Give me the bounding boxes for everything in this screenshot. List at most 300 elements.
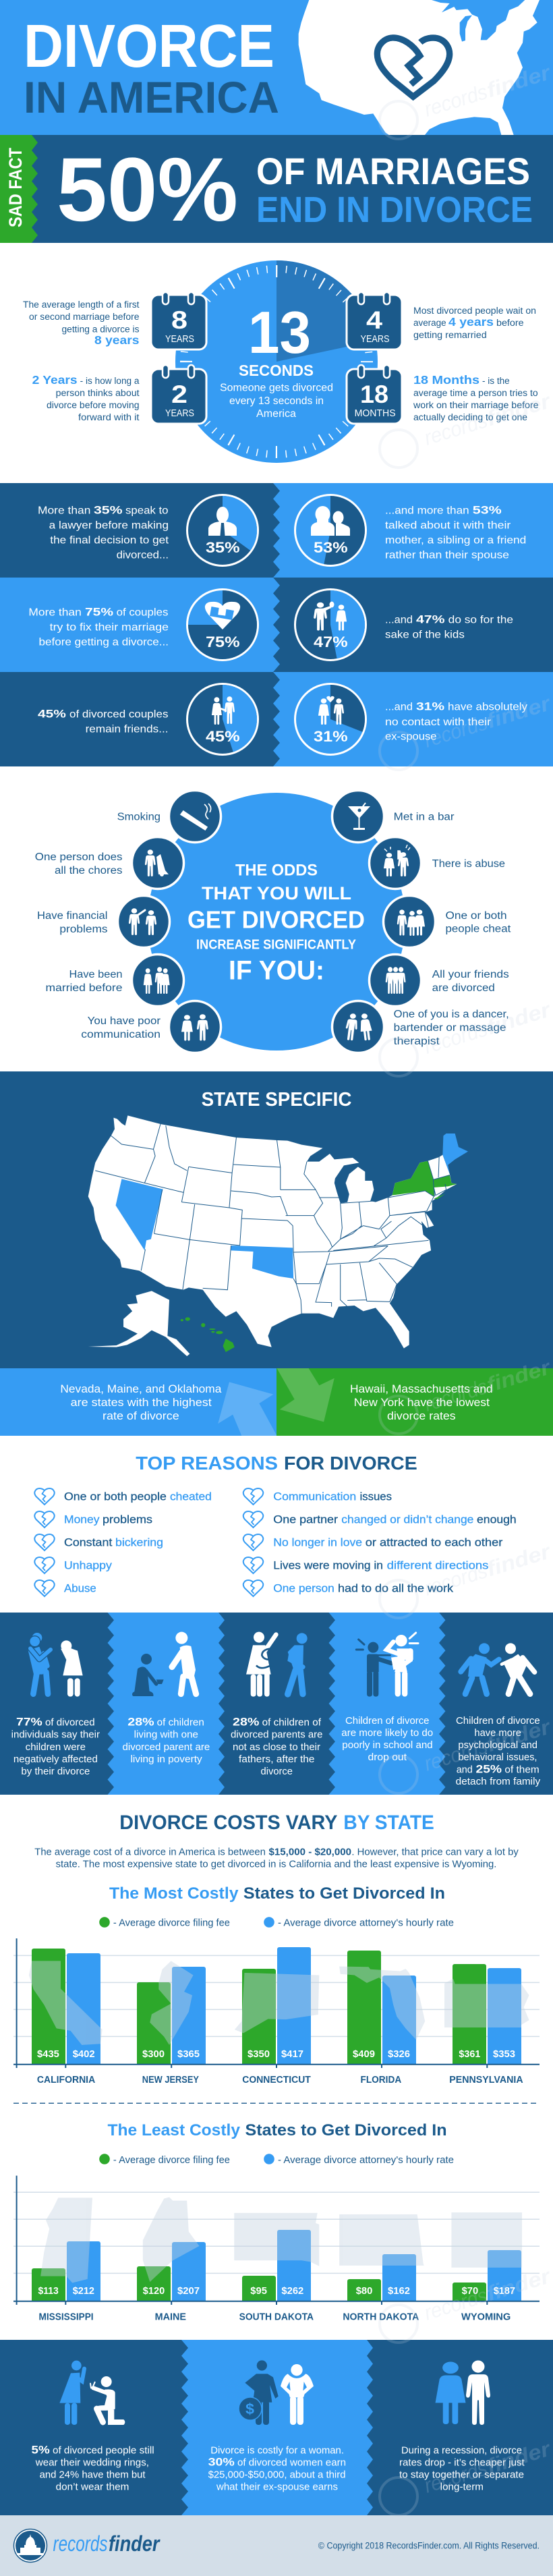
labels: left risk factors: Have been — [69, 969, 123, 980]
chart: least costly states: $162 — [388, 2285, 410, 2297]
text: 8 years: The average length of a first — [23, 300, 140, 310]
text: 77% affected: by their divorce — [21, 1766, 90, 1777]
legend: least costly: - Average divorce filing fee — [113, 2155, 230, 2166]
heading: of marriages: OF MARRIAGES — [256, 150, 530, 192]
icon: smoking — [169, 791, 221, 842]
text: 8 years — [23, 300, 140, 347]
text: 18 months: 18 Months — [413, 373, 479, 387]
icon: bandaged heart — [205, 602, 240, 629]
text: 53% talked to others: mother, a sibling or a friend — [385, 534, 526, 546]
text: 2 years — [32, 373, 140, 422]
map: state borders — [95, 1124, 450, 1314]
text: 4 years: Most divorced people wait on — [413, 306, 536, 316]
text: 31% no contact: no contact with their — [385, 717, 492, 728]
list: left reasons: Abuse — [64, 1583, 96, 1595]
text: 28% poverty: living with one — [134, 1730, 198, 1741]
icon: divorced friends — [370, 954, 421, 1007]
big number: 50%: 50% — [57, 140, 238, 240]
legend: most costly: - Average divorce filing fee — [113, 1917, 230, 1928]
labels: left risk factors — [35, 812, 161, 1040]
watermark: recordsfinder — [380, 60, 553, 2515]
text: 18 months: - is the — [482, 376, 510, 386]
watermark: recordsfinder: records — [421, 2456, 490, 2498]
text: 2 years: person thinks about — [56, 388, 140, 398]
icon: proposal — [59, 2361, 125, 2425]
panel: state specific — [0, 1071, 553, 1436]
logo: records finder: finder — [109, 2531, 161, 2556]
callout: lowest rate — [276, 1368, 553, 1436]
map: high divorce states Nevada Oklahoma Maine — [116, 1133, 468, 1279]
pie: 75% fix marriage: 75% — [206, 634, 240, 650]
list: right reasons: No longer in love — [273, 1537, 362, 1549]
text: 75% try to fix: of couples — [117, 607, 169, 619]
chart: most costly states: $365 — [177, 2048, 200, 2060]
text: 28% fathers: of children of — [262, 1718, 322, 1729]
icon: mother with child and father — [246, 1632, 308, 1697]
heading: the odds: GET DIVORCED — [187, 906, 365, 934]
text: costly for a woman: $25,000-$50,000, about a third — [208, 2469, 345, 2480]
chart: most costly states: $417 — [281, 2048, 303, 2060]
chart: most costly states: $353 — [493, 2048, 515, 2060]
panel: children of divorce — [0, 1613, 553, 1795]
heading: top reasons — [136, 1453, 417, 1474]
chart: least costly states: $120 — [143, 2285, 165, 2297]
heading: the odds: THAT YOU WILL — [202, 883, 351, 903]
big number: 13 seconds: Someone gets divorced — [220, 382, 333, 394]
text: 75% try to fix: before getting a divorce... — [39, 637, 169, 648]
text: intro paragraph: $15,000 - $20,000 — [268, 1847, 351, 1857]
text: 4 years: before — [496, 318, 524, 328]
icon: remarried — [132, 954, 183, 1007]
text: 28% fathers: not as close to their — [233, 1742, 320, 1753]
calendar: 18 months: MONTHS — [355, 408, 396, 419]
labels: right risk factors: bartender or massage — [394, 1022, 506, 1034]
text: wedding rings: don’t wear them — [56, 2482, 129, 2493]
text: 18 months: actually deciding to get one — [413, 412, 527, 422]
panel: statistics rows — [0, 483, 553, 766]
pie: 47% for the kids: 47% — [314, 634, 348, 650]
text: psychological: behavioral issues, — [458, 1752, 537, 1763]
chart: least costly states: $80 — [356, 2285, 372, 2297]
chart: least costly states: $113 — [38, 2285, 59, 2297]
list: left reasons: problems — [103, 1514, 152, 1526]
chart: most costly states: $350 — [248, 2048, 270, 2060]
big number: 13 seconds: SECONDS — [239, 362, 314, 379]
text: 77% affected: children were — [26, 1742, 86, 1753]
watermark: recordsfinder: records — [421, 1374, 490, 1416]
calendar: 8 years: YEARS — [165, 334, 194, 345]
panel: footer — [0, 2515, 553, 2576]
calendar: 2 years: 2 — [171, 381, 187, 408]
labels: right risk factors — [394, 812, 511, 1047]
chart: least costly states: $207 — [177, 2285, 200, 2297]
text: school — [341, 1716, 433, 1763]
map: United States by state — [88, 1115, 468, 1356]
text: 75% try to fix: More than — [28, 607, 82, 619]
heading: most costly — [109, 1884, 445, 1903]
legend: most costly — [99, 1917, 454, 1928]
text: 45% remain friends — [38, 707, 169, 735]
text: 18 months — [413, 373, 539, 422]
icon: poor communication — [169, 1001, 221, 1053]
callout: lowest rate: divorce rates — [387, 1410, 456, 1422]
chart: most costly states: $402 — [73, 2048, 95, 2060]
list: right reasons: different directions — [387, 1560, 488, 1572]
text: 4 years: getting remarried — [413, 330, 487, 340]
labels: left risk factors: Smoking — [117, 812, 161, 823]
state silhouettes: least costly — [40, 2197, 522, 2283]
text: recession: During a recession, divorce — [401, 2445, 522, 2456]
icon: child and angry parent — [356, 1633, 418, 1697]
text: wedding rings: and 24% have them but — [40, 2469, 146, 2480]
heading: divorce costs: DIVORCE COSTS VARY — [119, 1812, 338, 1834]
icon: lawyer — [208, 507, 237, 536]
map: United States silhouette — [299, 0, 540, 135]
chart: most costly states: FLORIDA — [360, 2075, 402, 2085]
text: 4 years — [413, 306, 536, 340]
chart: least costly states: SOUTH DAKOTA — [239, 2312, 314, 2322]
text: 2 years: 2 Years — [32, 373, 78, 387]
pie: 53% talk — [295, 495, 366, 565]
chart: least costly states: $187 — [494, 2285, 515, 2297]
text: 28% fathers: divorce — [260, 1766, 293, 1777]
text: intro paragraph: state. The most expensive state to get divorced in is California and the least expensive is Wyoming. — [56, 1859, 496, 1870]
text: intro paragraph: The average cost of a divorce in America is between — [34, 1847, 266, 1857]
icon: couple apart with heart — [318, 696, 344, 725]
heading: the odds: IF YOU: — [229, 956, 324, 986]
state silhouettes: most costly — [29, 1961, 529, 2045]
text: recession: rates drop - it’s cheaper just — [399, 2457, 525, 2468]
text: recession: to stay together or separate — [399, 2469, 524, 2480]
icon: couple together — [436, 2360, 490, 2425]
arrow: down — [277, 1368, 334, 1422]
watermark: recordsfinder: finder — [484, 2264, 553, 2305]
list: left reasons: Money — [64, 1514, 100, 1526]
icon: kneeling child and departing parent — [132, 1632, 196, 1696]
chart: least costly states: MAINE — [155, 2312, 186, 2322]
list: right reasons: changed or didn’t change — [341, 1514, 473, 1526]
panel: sad fact band — [0, 135, 553, 243]
chart: most costly states: $326 — [388, 2048, 410, 2060]
heading: the odds — [187, 862, 365, 986]
labels: right risk factors: One of you is a dancer, — [394, 1009, 509, 1020]
text: psychological: of them — [504, 1764, 540, 1775]
text: 47% for the kids: sake of the kids — [385, 629, 465, 641]
text: psychological — [456, 1716, 541, 1787]
chart: least costly states: $262 — [281, 2285, 303, 2297]
circle: odds background — [148, 793, 405, 1051]
callout: highest rate — [0, 1368, 277, 1436]
chart: clock face — [175, 260, 378, 463]
chart: most costly states: PENNSYLVANIA — [449, 2075, 523, 2085]
heading: top reasons: TOP REASONS — [136, 1453, 278, 1474]
calendar: 4 years: 4 — [366, 306, 382, 334]
icons: broken hearts — [34, 1488, 263, 1596]
pie: 31% no contact — [295, 684, 366, 754]
ribbon: sad fact — [0, 135, 38, 243]
pie: 47% for the kids — [295, 590, 366, 660]
pie: 35% lawyer: 35% — [206, 539, 240, 556]
callout: lowest rate: New York have the lowest — [354, 1397, 490, 1409]
labels: right risk factors: are divorced — [432, 982, 495, 994]
watermark: recordsfinder: records — [421, 1017, 490, 1059]
panel: clock timeline — [23, 260, 539, 463]
text: 53% talked to others: rather than their spouse — [385, 550, 509, 561]
text: 18 months: work on their marriage before — [413, 400, 539, 410]
chart: least costly states: MISSISSIPPI — [39, 2312, 94, 2322]
big number: 13 seconds: every 13 seconds in — [229, 395, 324, 407]
text: 31% no contact: ex-spouse — [385, 731, 437, 743]
icon: woman with money and man — [239, 2360, 314, 2425]
text: 77% affected — [11, 1716, 100, 1777]
text: 28% poverty — [123, 1716, 210, 1765]
icon: dancers — [332, 1001, 384, 1053]
labels: right risk factors: people cheat — [445, 924, 511, 935]
text: 45% remain friends: 45% — [38, 707, 66, 720]
heading: the odds: INCREASE SIGNIFICANTLY — [196, 938, 357, 953]
text: 47% for the kids: do so for the — [448, 615, 513, 626]
icon: chores — [132, 837, 183, 889]
list: right reasons: One partner — [273, 1514, 339, 1526]
labels: right risk factors: One or both — [445, 910, 507, 922]
text: 4 years: average — [413, 318, 446, 328]
text: 45% remain friends: remain friends... — [86, 724, 169, 735]
heading: most costly: The Most Costly — [109, 1884, 239, 1903]
list: left reasons: cheated — [170, 1491, 212, 1503]
chart: most costly states: $435 — [37, 2048, 59, 2060]
text: school: are more likely to do — [341, 1728, 433, 1739]
list: left reasons: bickering — [115, 1537, 163, 1549]
chart: least costly states: WYOMING — [461, 2312, 511, 2322]
list: left reasons: Constant — [64, 1537, 113, 1549]
text: 31% no contact: ...and — [385, 702, 413, 713]
text: psychological: 25% — [476, 1762, 502, 1775]
text: copyright: © Copyright 2018 RecordsFinder.com. All Rights Reserved. — [318, 2541, 540, 2550]
labels: left risk factors: problems — [59, 924, 108, 935]
watermark: recordsfinder: finder — [484, 997, 553, 1039]
list: right reasons — [273, 1491, 517, 1595]
text: wedding rings — [31, 2444, 154, 2493]
legend: least costly: - Average divorce attorney's hourly rate — [278, 2155, 454, 2166]
ribbon: sad fact: SAD FACT — [5, 148, 26, 227]
text: 77% affected: 77% — [16, 1716, 42, 1729]
callout: highest rate: rate of divorce — [103, 1410, 179, 1422]
watermark: recordsfinder: records — [421, 408, 490, 450]
list: right reasons: issues — [360, 1491, 392, 1503]
calendar: 4 years: YEARS — [360, 334, 390, 345]
text: 47% for the kids: ...and — [385, 615, 413, 626]
icon: parent and child with balloon — [314, 602, 347, 630]
pie: 45% friends: 45% — [206, 728, 240, 745]
chart: least costly states: NORTH DAKOTA — [343, 2312, 419, 2322]
icon: financial problems — [117, 896, 170, 947]
text: 47% for the kids — [385, 613, 513, 641]
heading: least costly — [108, 2121, 447, 2139]
labels: right risk factors: Met in a bar — [394, 812, 455, 823]
watermark: recordsfinder: finder — [484, 2436, 553, 2478]
labels: left risk factors: One person does — [35, 851, 123, 863]
text: costly for a woman: 30% — [208, 2455, 235, 2468]
text: costly for a woman: of divorced women earn — [237, 2457, 346, 2468]
text: 2 years: forward with it — [78, 412, 140, 422]
heading: end in divorce: END IN DIVORCE — [256, 190, 533, 230]
chart: most costly states: CALIFORNIA — [37, 2075, 96, 2085]
calendar: 4 years — [347, 292, 402, 349]
text: 18 months: average time a person tries to — [413, 388, 538, 398]
labels: right risk factors: All your friends — [432, 969, 509, 980]
panel: odds of divorce — [35, 791, 511, 1053]
text: costly for a woman: what their ex-spouse earns — [216, 2482, 338, 2493]
labels: right risk factors: therapist — [394, 1036, 440, 1047]
text: 28% fathers: 28% — [233, 1716, 259, 1729]
text: 75% try to fix: 75% — [85, 606, 113, 619]
title: Divorce: DIVORCE — [24, 13, 274, 80]
text: 28% poverty: living in poverty — [131, 1754, 202, 1765]
watermark: recordsfinder: records — [421, 1559, 490, 1600]
text: wedding rings: 5% — [31, 2444, 50, 2456]
text: psychological: and — [457, 1764, 473, 1775]
text: 4 years: 4 years — [448, 315, 494, 329]
watermark: recordsfinder: records — [421, 2283, 490, 2325]
logo: records finder: records — [53, 2531, 108, 2556]
list: right reasons: had to do all the work — [338, 1583, 454, 1595]
big number: 13 seconds — [220, 299, 333, 420]
labels: left risk factors: Have financial — [37, 910, 108, 922]
text: 35% speak to a lawyer: More than — [38, 505, 90, 517]
watermark: recordsfinder: records — [421, 1734, 490, 1776]
text: 31% no contact: have absolutely — [448, 702, 527, 713]
calendar: 8 years: 8 — [171, 306, 187, 334]
heading: divorce costs: BY STATE — [343, 1812, 434, 1834]
pie: 53% talk: 53% — [314, 539, 348, 556]
text: 47% for the kids: 47% — [416, 613, 445, 626]
heading: the odds: THE ODDS — [235, 862, 318, 880]
list: left reasons — [64, 1491, 212, 1595]
icon: woman and man busts — [311, 506, 350, 536]
legend: most costly: - Average divorce attorney's hourly rate — [278, 1917, 454, 1928]
big number: 13 seconds: America — [256, 408, 296, 420]
text: 53% talked to others: ...and more than — [385, 505, 469, 517]
text: 2 years: divorce before moving — [47, 400, 139, 410]
watermark: recordsfinder: finder — [484, 1714, 553, 1756]
map: Alaska — [88, 1291, 190, 1356]
heading: least costly: States to Get Divorced In — [245, 2121, 447, 2139]
text: 28% poverty: of children — [157, 1718, 204, 1729]
chart: most costly states: $361 — [459, 2048, 480, 2060]
text: 28% fathers — [231, 1716, 322, 1777]
legend: least costly — [99, 2154, 454, 2166]
text: psychological: have more — [474, 1728, 521, 1739]
text: 2 years: - is how long a — [80, 376, 140, 386]
heading: state specific: STATE SPECIFIC — [202, 1089, 351, 1111]
icon: martini — [332, 791, 384, 842]
icon: cheating — [383, 896, 436, 947]
watermark: recordsfinder: finder — [484, 389, 553, 430]
watermark: recordsfinder: finder — [484, 1355, 553, 1397]
list: left reasons: Unhappy — [64, 1560, 113, 1572]
text: intro paragraph: . However, that price can vary a lot by — [351, 1847, 519, 1857]
pie: 45% friends — [187, 684, 258, 754]
chart: least costly states: $95 — [250, 2285, 267, 2297]
chart: least costly states: $70 — [462, 2285, 478, 2297]
labels: left risk factors: communication — [81, 1029, 161, 1040]
text: costly for a woman — [208, 2445, 346, 2493]
text: 77% affected: individuals say their — [11, 1730, 100, 1741]
chart: least costly states — [13, 2176, 540, 2322]
text: 75% try to fix: try to fix their marriage — [50, 622, 169, 634]
logo: records finder — [13, 2529, 161, 2563]
calendar: 2 years — [151, 365, 206, 424]
list: right reasons: Communication — [273, 1491, 356, 1503]
callout: highest rate: Nevada, Maine, and Oklahoma — [60, 1383, 222, 1395]
text: recession: long-term — [440, 2482, 484, 2493]
callout: lowest rate: Hawaii, Massachusetts and — [350, 1383, 493, 1395]
calendar: 18 months — [347, 365, 402, 424]
map: low divorce states New York Massachusetts Hawaii — [181, 1161, 457, 1352]
text: psychological: psychological and — [458, 1740, 537, 1751]
chart: most costly states: $300 — [142, 2048, 165, 2060]
text: 28% poverty: divorced parent are — [123, 1742, 210, 1753]
panel: hero — [0, 0, 553, 135]
text: 8 years: 8 years — [94, 333, 140, 347]
text: 35% speak to a lawyer: the final decision to get — [50, 534, 169, 546]
text: costly for a woman: Divorce is costly for a woman. — [210, 2445, 344, 2456]
text: psychological: detach from family — [456, 1776, 541, 1787]
labels: left risk factors: You have poor — [88, 1015, 161, 1027]
text: 45% remain friends: of divorced couples — [69, 708, 169, 720]
text: 35% speak to a lawyer: a lawyer before making — [49, 520, 169, 531]
calendar: 18 months: 18 — [360, 381, 388, 408]
panel: divorce costs — [13, 1812, 540, 2322]
chart: most costly states — [13, 1938, 540, 2085]
text: 35% speak to a lawyer: 35% — [94, 504, 123, 517]
big number: 13 seconds: 13 — [248, 299, 311, 366]
text: 28% poverty: 28% — [127, 1716, 154, 1729]
heading: least costly: The Least Costly — [108, 2121, 241, 2139]
list: right reasons: One person — [273, 1583, 334, 1595]
watermark: recordsfinder: records — [421, 710, 490, 752]
chart: most costly states: CONNECTICUT — [242, 2075, 311, 2085]
text: wedding rings: of divorced people still — [53, 2445, 154, 2456]
list: left reasons: One or both people — [64, 1491, 167, 1503]
pie: 31% no contact: 31% — [314, 728, 348, 745]
icon: parent hugging child, mother crying — [28, 1633, 83, 1697]
callout: highest rate: are states with the highest — [71, 1397, 212, 1409]
list: right reasons: enough — [477, 1514, 517, 1526]
heading: most costly: States to Get Divorced In — [243, 1884, 445, 1903]
calendar: 2 years: YEARS — [165, 408, 194, 419]
text: 53% talked to others — [385, 504, 526, 561]
text: school: drop out — [368, 1752, 407, 1763]
chart: most costly states: NEW JERSEY — [142, 2075, 199, 2085]
labels: left risk factors: married before — [46, 982, 123, 994]
text: 35% speak to a lawyer: speak to — [125, 505, 169, 517]
labels: right risk factors: There is abuse — [432, 858, 505, 870]
text: 75% try to fix — [28, 606, 169, 648]
text: 28% fathers: divorced parents are — [231, 1730, 322, 1741]
text: school: poorly in school and — [342, 1740, 433, 1751]
watermark: recordsfinder: finder — [484, 1539, 553, 1581]
panel: top reasons — [34, 1453, 517, 1596]
text: 31% no contact — [385, 700, 527, 743]
icon: handshake — [212, 696, 235, 725]
text: 8 years: or second marriage before — [29, 312, 139, 322]
text: 31% no contact: 31% — [416, 700, 444, 713]
watermark: recordsfinder: records — [421, 80, 490, 121]
pie: 75% fix marriage — [187, 590, 258, 660]
list: right reasons: or attracted to each other — [366, 1537, 503, 1549]
icon: broken heart — [377, 38, 450, 96]
